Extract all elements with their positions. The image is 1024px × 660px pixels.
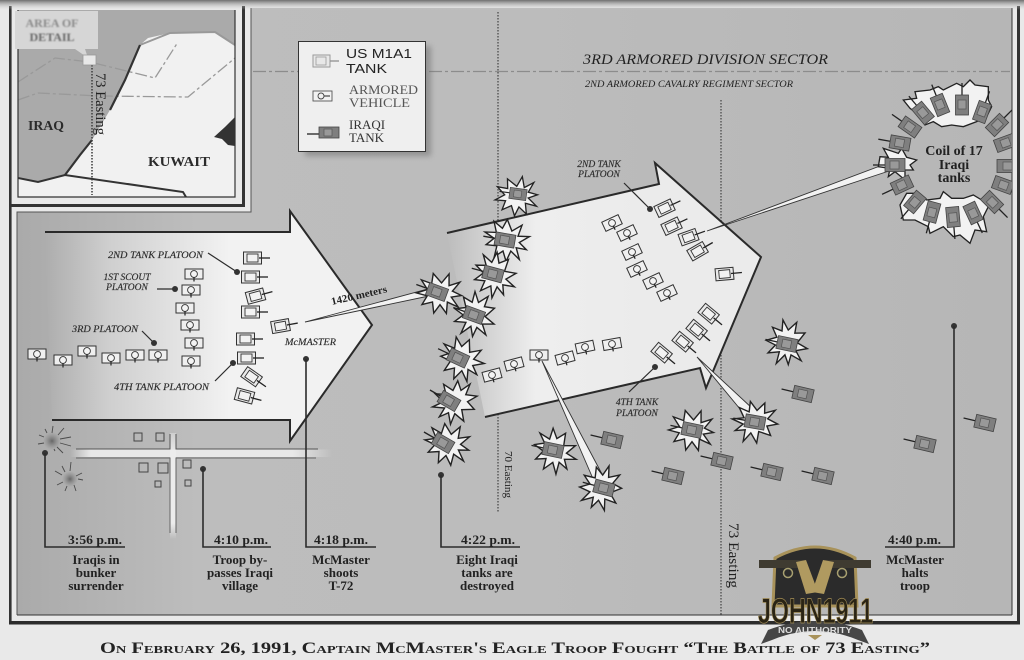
timeline: 4:22 p.m.: destroyed [460, 578, 515, 593]
firing beam: fourth platoon [697, 357, 753, 415]
easting line: 70 [497, 12, 499, 513]
label: 1420 meters: 1420 meters [330, 284, 388, 308]
timeline: 4:10 p.m.: 4:10 p.m. [214, 532, 268, 547]
timeline: 4:22 p.m. [438, 472, 520, 593]
timeline: 3:56 p.m.: Iraqis in [72, 552, 120, 567]
label: coil of 17 Iraqi tanks: Coil of 17 [925, 144, 983, 159]
destroyed Iraqi tanks [412, 173, 812, 518]
label: 2nd tank platoon [108, 251, 240, 275]
area of detail tag: AREA OF [25, 16, 79, 30]
frame bottom thin line [17, 614, 1012, 616]
timeline: 4:10 p.m.: Troop by- [213, 552, 267, 567]
timeline: 4:18 p.m.: 4:18 p.m. [314, 532, 368, 547]
legend: Iraqi tank: IRAQI [349, 117, 385, 132]
legend: armored vehicle [313, 82, 418, 110]
label: 4th tank platoon (second arrow): 4TH TANK [616, 398, 659, 408]
label: 4th tank platoon (second arrow) [615, 364, 659, 419]
arrow: first advance [45, 211, 372, 441]
legend: Iraqi tank [307, 117, 385, 145]
label: coil of 17 Iraqi tanks: tanks [938, 171, 971, 186]
legend: armored vehicle: ARMORED [349, 82, 418, 97]
timeline: 4:22 p.m.: 4:22 p.m. [461, 532, 515, 547]
firing beam: to coil [707, 163, 889, 231]
legend: US M1A1 tank: TANK [346, 61, 387, 76]
top scan shadow [0, 0, 1024, 10]
timeline: 3:56 p.m.: 3:56 p.m. [68, 532, 122, 547]
US tanks in second arrow [651, 195, 742, 369]
legend [298, 42, 431, 156]
timeline: 4:10 p.m. [200, 466, 273, 593]
timeline: 4:18 p.m.: T-72 [329, 578, 353, 593]
firing beam: third platoon [542, 361, 603, 481]
timeline: 4:40 p.m.: McMaster [886, 552, 944, 567]
timeline: 3:56 p.m.: bunker [76, 565, 116, 580]
label: 3rd platoon [71, 325, 157, 346]
legend: armored vehicle: VEHICLE [349, 95, 410, 110]
label: 2nd tank platoon: 2ND TANK PLATOON [108, 251, 204, 261]
label: coil of 17 Iraqi tanks [925, 144, 983, 186]
coil of 17 Iraqi tanks [873, 80, 1024, 243]
heading: 3rd Armored Division sector: 3RD ARMORED DIVISION SECTOR [582, 52, 828, 68]
timeline: 4:22 p.m.: Eight Iraqi [456, 552, 518, 567]
timeline: 4:18 p.m.: McMaster [312, 552, 370, 567]
timeline: 4:10 p.m.: passes Iraqi [207, 565, 273, 580]
watermark logo: NO AUTHORITY [778, 625, 852, 635]
timeline: 3:56 p.m. [42, 450, 125, 593]
inset map [15, 10, 235, 197]
road and village [70, 433, 332, 539]
label: Kuwait: KUWAIT [148, 155, 211, 170]
label: 70 Easting: 70 Easting [502, 451, 514, 498]
label: 4th tank platoon [114, 360, 236, 393]
arrow: second advance [447, 163, 761, 417]
area of detail tag: DETAIL [29, 30, 75, 44]
timeline: 4:22 p.m.: tanks are [461, 565, 513, 580]
label: 1st scout platoon [103, 273, 178, 293]
easting line: 73 [720, 100, 722, 615]
timeline: 4:40 p.m.: troop [900, 578, 930, 593]
legend: Iraqi tank: TANK [349, 130, 385, 145]
US tanks in first arrow [234, 252, 299, 406]
heading: 2nd Armored Cavalry Regiment sector: 2ND ARMORED CAVALRY REGIMENT SECTOR [585, 80, 793, 90]
label: 2nd tank platoon (second arrow): PLATOON [577, 170, 621, 180]
area of detail tag [15, 11, 98, 65]
watermark logo: JOHN1911 [758, 592, 873, 631]
label: 1st scout platoon: 1ST SCOUT [103, 273, 151, 283]
intact Iraqi tanks [589, 383, 996, 485]
armored vehicles in first arrow [28, 269, 203, 368]
label: 73 Easting: 73 Easting [725, 523, 741, 589]
firing beam: McMaster to T-72 [305, 289, 429, 322]
label: 4th tank platoon: 4TH TANK PLATOON [114, 383, 210, 393]
legend: US M1A1 tank: US M1A1 [346, 46, 412, 61]
label: inset 73 Easting: 73 Easting [92, 73, 108, 135]
label: McMaster: McMASTER [284, 338, 336, 348]
caption: On February 26, 1991, Captain McMaster's Eagle Troop Fought “The Battle of 73 Easting” [100, 640, 930, 657]
icon: bunker explosion 2 [55, 462, 83, 491]
sector boundary line [253, 70, 1010, 72]
timeline: 4:10 p.m.: village [222, 578, 258, 593]
legend: US M1A1 tank [313, 46, 412, 76]
armored vehicles in second arrow [482, 215, 678, 385]
timeline: 4:18 p.m. [303, 356, 376, 593]
watermark logo [758, 547, 873, 644]
timeline: 3:56 p.m.: surrender [68, 578, 124, 593]
icon: bunker explosion 1 [38, 426, 71, 453]
timeline: 4:40 p.m.: halts [902, 565, 928, 580]
label: coil of 17 Iraqi tanks: Iraqi [939, 158, 969, 173]
timeline: 4:40 p.m.: 4:40 p.m. [888, 532, 941, 547]
label: 4th tank platoon (second arrow): PLATOON [615, 409, 659, 419]
timeline: 4:18 p.m.: shoots [324, 565, 358, 580]
timeline: 4:40 p.m. [885, 323, 957, 593]
label: Iraq: IRAQ [28, 119, 64, 134]
label: 2nd tank platoon (second arrow) [577, 160, 653, 212]
label: 2nd tank platoon (second arrow): 2ND TANK [577, 160, 621, 170]
label: 3rd platoon: 3RD PLATOON [71, 325, 139, 335]
label: 1st scout platoon: PLATOON [105, 283, 149, 293]
